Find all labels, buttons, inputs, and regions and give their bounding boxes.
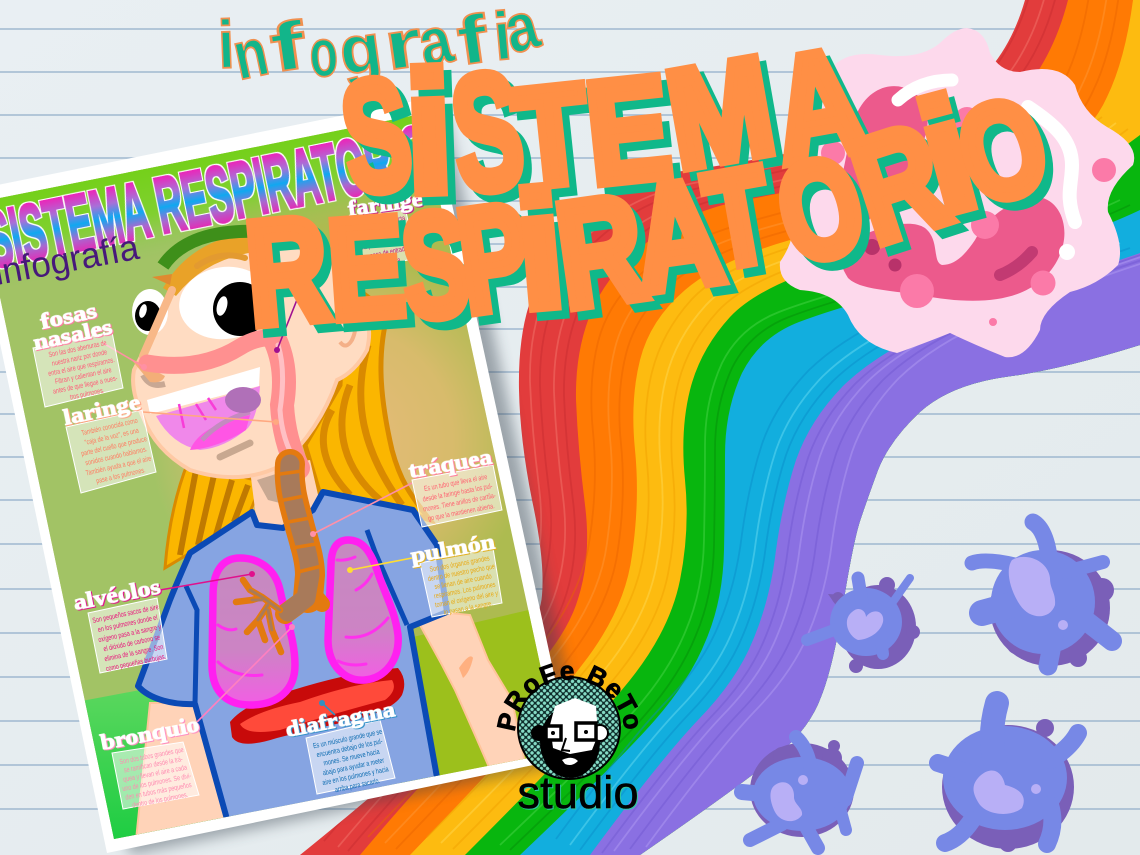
logo studio wordmark: studio bbox=[518, 767, 638, 818]
label: faringe: faringe bbox=[346, 186, 424, 221]
title line: RESPiRATORiO: A bbox=[623, 146, 732, 324]
label: pulmon: Son dos órganos grandes bbox=[429, 555, 490, 574]
label: faringe bbox=[347, 196, 424, 262]
subtitle: infografia: o bbox=[307, 14, 340, 92]
logo arc path bbox=[515, 680, 625, 745]
poster: infographic sheet bbox=[0, 98, 580, 855]
label: fosas nasales: entra el aire que respiramos. bbox=[48, 356, 116, 378]
label: diafragma: arriba para sacarlo. bbox=[334, 777, 381, 794]
logo arc text: PRoFe BeTo bbox=[496, 663, 638, 731]
label: diafragma: encuentra debajo de los pul- bbox=[316, 738, 383, 760]
label: alveolos: como pequeñas burbujas. bbox=[105, 653, 167, 674]
label: traquea: tráquea bbox=[407, 444, 494, 483]
title line: RESPiRATORiO: i bbox=[509, 156, 571, 344]
title line: RESPiRATORiO: R bbox=[240, 185, 335, 357]
title line: RESPiRATORiO: R bbox=[547, 162, 654, 340]
character: neck bbox=[251, 460, 318, 525]
logo face bbox=[531, 698, 608, 778]
label: laringe: laringe bbox=[61, 389, 143, 430]
blob organism upper bbox=[838, 86, 928, 230]
virus: small top bbox=[807, 577, 920, 673]
rainbow paint stream bbox=[300, 0, 1140, 855]
label: bronquio: uno de los pulmones. Se divi- bbox=[122, 772, 192, 793]
logo: Profe Beto studio bbox=[496, 663, 638, 818]
title line: RESPiRATORiO: T bbox=[695, 139, 782, 298]
label: alveolos: el dióxido de carbono se bbox=[103, 634, 161, 654]
label: traquea: go que la mantienen abierta. bbox=[428, 502, 495, 523]
label: faringe: la tráquea. Es donde el bbox=[354, 234, 409, 253]
virus: bottom right bbox=[938, 703, 1078, 852]
subtitle: infografia bbox=[217, 0, 548, 95]
title line: SiSTEMA: E bbox=[579, 45, 678, 215]
label: bronquio bbox=[98, 711, 201, 811]
label: alveolos: en los pulmones donde el bbox=[97, 614, 158, 634]
title line: RESPiRATORiO: i bbox=[903, 63, 992, 248]
label: fosas nasales bbox=[31, 297, 123, 407]
title line: RESPiRATORiO: R bbox=[833, 90, 965, 276]
organ: diaphragm bbox=[230, 668, 404, 744]
label: fosas nasales: nuestra nariz por donde bbox=[51, 348, 108, 368]
label: diafragma: aire en los pulmones y hacia bbox=[322, 765, 390, 787]
title line: RESPiRATORiO: O bbox=[762, 125, 879, 294]
subtitle: infografia: f bbox=[452, 0, 493, 80]
character: eyes bbox=[132, 266, 258, 340]
title line: RESPiRATORiO: O bbox=[940, 65, 1065, 235]
pointer lines and dots bbox=[103, 262, 412, 722]
character: arms bbox=[135, 612, 526, 850]
label: traquea: desde la faringe hasta los pul- bbox=[422, 482, 493, 504]
character: head bbox=[133, 245, 369, 477]
label: bronquio: dentro de los pulmones. bbox=[132, 791, 189, 810]
label: laringe bbox=[61, 389, 156, 493]
label: alveolos: alvéolos bbox=[71, 573, 163, 615]
title line: RESPiRATORiO: E bbox=[323, 188, 410, 350]
label: alveolos: Son pequeños sacos de aire bbox=[92, 603, 160, 625]
label: pulmon: respiramos. Los pulmones bbox=[433, 581, 496, 601]
label: diafragma bbox=[286, 706, 398, 795]
label: pulmon bbox=[409, 529, 503, 619]
organ: lungs bbox=[212, 540, 398, 705]
title line: SiSTEMA: S bbox=[332, 43, 421, 227]
label: fosas nasales: nasales bbox=[31, 314, 115, 355]
label: diafragma: mones. Se mueve hacia bbox=[323, 748, 381, 768]
label: bronquio: den en tubos más pequeños bbox=[125, 781, 192, 802]
label: diafragma: abajo para ayudar a meter bbox=[322, 757, 386, 778]
label: pulmon: se llenan de aire cuando bbox=[434, 572, 493, 591]
label: laringe: "caja de la voz", es una bbox=[84, 427, 140, 447]
blob body bbox=[780, 28, 1134, 357]
lung detail strokes bbox=[218, 557, 388, 675]
label: pulmon: lo pasan a la sangre. bbox=[443, 600, 493, 617]
logo halftone circle bbox=[518, 677, 620, 779]
subtitle: infografia: a bbox=[410, 1, 461, 83]
label: diafragma: Es un músculo grande que se bbox=[312, 728, 383, 751]
label: pulmon: toman el oxígeno del aire y bbox=[434, 589, 499, 610]
poster illustration and labels: SISTEMA RESPIRATORIO bbox=[0, 108, 438, 285]
subtitle: infografia: f bbox=[266, 7, 311, 87]
neck shadow bbox=[257, 474, 278, 502]
label: faringe: aire pasa de entrada bbox=[359, 245, 409, 263]
title line: SiSTEMA: M bbox=[656, 27, 785, 198]
label: pulmon: dentro de nuestro pecho que bbox=[427, 563, 496, 584]
label: fosas nasales: Filtran y calientan el aire bbox=[54, 366, 113, 386]
label: bronquio: Son dos tubos grandes que bbox=[119, 746, 185, 766]
organ: trachea and bronchi bbox=[236, 464, 322, 652]
label: laringe: pase a los pulmones. bbox=[95, 466, 146, 486]
poster illustration and labels bbox=[0, 108, 580, 855]
label: diafragma: diafragma bbox=[283, 696, 397, 742]
title line: RESPiRATORiO bbox=[240, 63, 1065, 357]
character: hair top and headband bbox=[152, 224, 249, 296]
title line: RESPiRATORiO: P bbox=[449, 172, 540, 345]
label: laringe: También ayuda a que el aire bbox=[85, 455, 152, 478]
label: fosas nasales: fosas bbox=[38, 297, 99, 334]
title line: SiSTEMA: A bbox=[760, 16, 877, 196]
subtitle: infografia: i bbox=[217, 7, 236, 83]
label: fosas nasales: antes de que llegue a nues- bbox=[52, 375, 118, 396]
character: blue shirt bbox=[138, 492, 447, 830]
virus: bottom left bbox=[742, 737, 857, 848]
blob dots and highlights bbox=[821, 80, 1116, 326]
label: traquea: Es un tubo que lleva el aire bbox=[423, 473, 488, 493]
label: alveolos: elimina de la sangre. Son bbox=[104, 643, 164, 664]
subtitle: infografia: g bbox=[335, 9, 386, 90]
character: elbow mark bbox=[459, 656, 473, 678]
title line: SiSTEMA: S bbox=[442, 38, 533, 229]
label: alveolos: oxígeno pasa a la sangre y bbox=[98, 623, 163, 644]
title line: SiSTEMA: T bbox=[507, 53, 596, 218]
label: alveolos bbox=[74, 582, 168, 674]
label: laringe: parte del cuello que produce bbox=[80, 435, 148, 458]
label: fosas nasales: Son las dos aberturas de bbox=[48, 339, 108, 359]
virus: large top right bbox=[972, 522, 1114, 667]
label: laringe: sonidos cuando hablamos. bbox=[85, 445, 148, 468]
character: nose bbox=[130, 290, 172, 385]
decorative pink cell blob bbox=[780, 28, 1134, 357]
character: hair back bbox=[165, 280, 430, 568]
title line: RESPiRATORiO: S bbox=[396, 179, 475, 350]
label: traquea bbox=[407, 444, 502, 527]
label: pulmon: pulmón bbox=[409, 529, 497, 568]
character: nasal passage and pharynx bbox=[147, 338, 298, 468]
blob organism lower bbox=[837, 197, 1064, 301]
title line: SiSTEMA: i bbox=[402, 36, 456, 230]
shirt sleeve folds bbox=[186, 530, 407, 704]
label: faringe: Es un tubo que conecta bbox=[349, 215, 406, 234]
subtitle: infografia: n bbox=[226, 14, 275, 95]
poster drop shadow bbox=[0, 108, 585, 855]
character: mouth bbox=[147, 367, 261, 457]
title line: SiSTEMA bbox=[332, 16, 877, 230]
subtitle: infografia: r bbox=[379, 4, 427, 85]
label: bronquio: quea y llevan el aire a cada bbox=[123, 764, 188, 784]
label: fosas nasales: tros pulmones. bbox=[69, 387, 105, 402]
main title: SISTEMA RESPIRATORIO bbox=[240, 16, 1065, 357]
label: bronquio: se ramifican desde la trá- bbox=[123, 756, 183, 775]
label: faringe: la boca y la nariz con bbox=[354, 225, 405, 243]
label: faringe: a la garganta. bbox=[369, 256, 403, 271]
poster white border bbox=[0, 98, 572, 853]
label: traquea: mones. Tiene anillos de cartíla- bbox=[423, 492, 496, 514]
character: ear bbox=[338, 331, 357, 348]
label: laringe: También conocida como bbox=[81, 417, 139, 438]
label: bronquio: bronquio bbox=[98, 711, 201, 755]
